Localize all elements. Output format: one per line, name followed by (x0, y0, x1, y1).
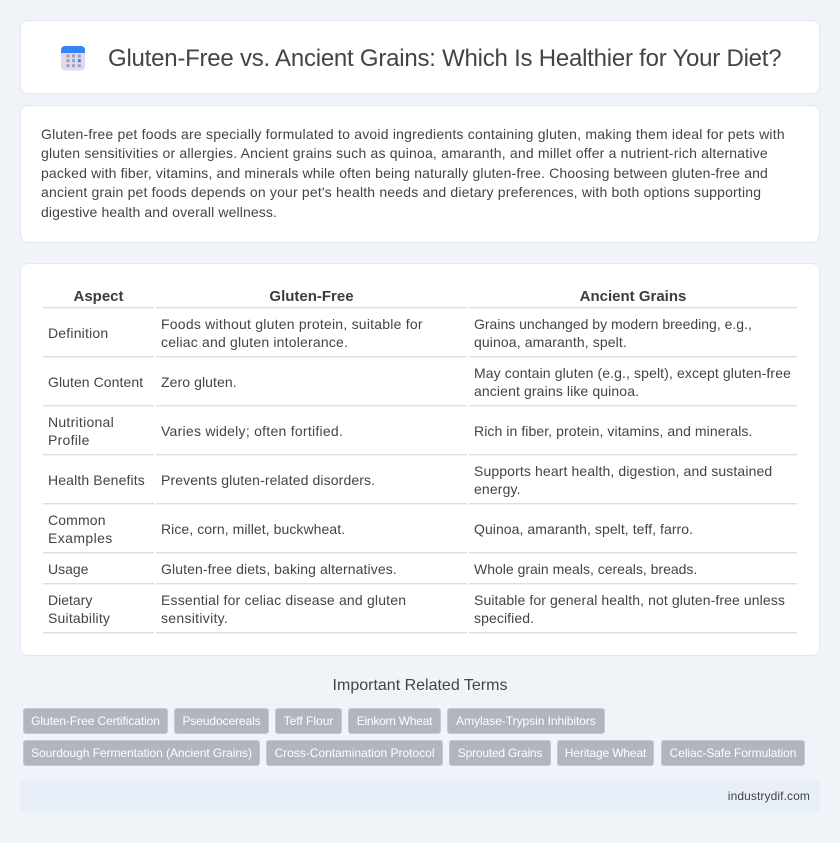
comparison table: ancient grains like quinoa. (474, 383, 639, 399)
tag: Einkorn Wheat (357, 714, 432, 728)
comparison table: quinoa, amaranth, spelt. (474, 334, 627, 350)
comparison table: specified. (474, 610, 534, 626)
comparison table: Nutritional (48, 414, 114, 430)
tag: Teff Flour (284, 714, 333, 728)
tag (661, 740, 805, 766)
comparison table: Zero gluten. (161, 374, 237, 390)
comparison table: Grains unchanged by modern breeding, e.g., (474, 316, 752, 332)
footer source: industrydif.com (728, 789, 810, 803)
comparison table: Definition (48, 325, 108, 341)
panel: comparison table (20, 263, 820, 656)
intro paragraph: ancient grain pet foods depends on your pet's health needs and dietary preferences, with both options supporting (41, 184, 761, 200)
comparison table: energy. (474, 481, 521, 497)
intro paragraph: digestive health and overall wellness. (41, 204, 277, 220)
intro paragraph: gluten sensitivities or allergies. Ancient grains such as quinoa, amaranth, and millet offer a nutrient-rich alternative (41, 145, 768, 161)
comparison table: Gluten Content (48, 374, 143, 390)
comparison table: Dietary (48, 592, 92, 608)
comparison table: May contain gluten (e.g., spelt), except gluten-free (474, 365, 791, 381)
column header: Ancient Grains: Ancient Grains (580, 288, 686, 305)
comparison table: Supports heart health, digestion, and sustained (474, 463, 772, 479)
tag (348, 708, 441, 734)
tag (23, 740, 260, 766)
comparison table: Varies widely; often fortified. (161, 423, 343, 439)
row: Nutritional Profile (48, 414, 752, 448)
comparison table: Foods without gluten protein, suitable for (161, 316, 423, 332)
row: Dietary Suitability (48, 592, 785, 626)
comparison table: sensitivity. (161, 610, 228, 626)
tag (557, 740, 654, 766)
column header: Aspect: Aspect (73, 288, 124, 305)
panel: intro text (20, 105, 820, 243)
comparison table: Whole grain meals, cereals, breads. (474, 561, 697, 577)
tag: Gluten-Free Certification (31, 714, 160, 728)
comparison table: Suitable for general health, not gluten-free unless (474, 592, 785, 608)
icon: calendar (61, 46, 85, 70)
column header: Gluten-Free: Gluten-Free (269, 288, 354, 305)
comparison table: Gluten-free diets, baking alternatives. (161, 561, 397, 577)
tag: Sourdough Fermentation (Ancient Grains) (31, 746, 252, 760)
comparison table: Rich in fiber, protein, vitamins, and minerals. (474, 423, 752, 439)
comparison table: Suitability (48, 610, 110, 626)
intro paragraph: packed with fiber, vitamins, and minerals while often being naturally gluten-free. Choosing between gluten-free and (41, 165, 768, 181)
related terms tags (23, 708, 805, 766)
comparison table: Health Benefits (48, 472, 145, 488)
tag (449, 740, 551, 766)
tag: Amylase-Trypsin Inhibitors (456, 714, 596, 728)
comparison table: Usage (48, 561, 88, 577)
intro paragraph: Gluten-free pet foods are specially formulated to avoid ingredients containing gluten, making them ideal for pets with (41, 126, 785, 142)
tag (266, 740, 443, 766)
tag: Celiac-Safe Formulation (670, 746, 796, 760)
comparison table: celiac and gluten intolerance. (161, 334, 348, 350)
tag (275, 708, 342, 734)
tag: Cross-Contamination Protocol (274, 746, 435, 760)
tag: Sprouted Grains (458, 746, 542, 760)
comparison table: Profile (48, 432, 90, 448)
comparison table: Rice, corn, millet, buckwheat. (161, 521, 345, 537)
row: Gluten Content (48, 365, 791, 399)
tag: Pseudocereals (182, 714, 261, 728)
tag (23, 708, 168, 734)
row: Definition (48, 316, 752, 350)
comparison table: Essential for celiac disease and gluten (161, 592, 406, 608)
comparison table: Quinoa, amaranth, spelt, teff, farro. (474, 521, 693, 537)
comparison table: Examples (48, 530, 113, 546)
tag (174, 708, 269, 734)
row: Usage (48, 561, 697, 577)
intro paragraph (41, 126, 785, 220)
row: Health Benefits (48, 463, 772, 497)
panel: title card (20, 20, 820, 94)
comparison table: Common (48, 512, 106, 528)
heading: related terms: Important Related Terms (333, 677, 507, 694)
tag: Heritage Wheat (565, 746, 646, 760)
tag (447, 708, 605, 734)
comparison table: Prevents gluten-related disorders. (161, 472, 375, 488)
footer bar (20, 779, 820, 813)
row: Common Examples (48, 512, 693, 546)
title: Gluten-Free vs. Ancient Grains: Which Is Healthier for Your Diet? (108, 45, 781, 72)
